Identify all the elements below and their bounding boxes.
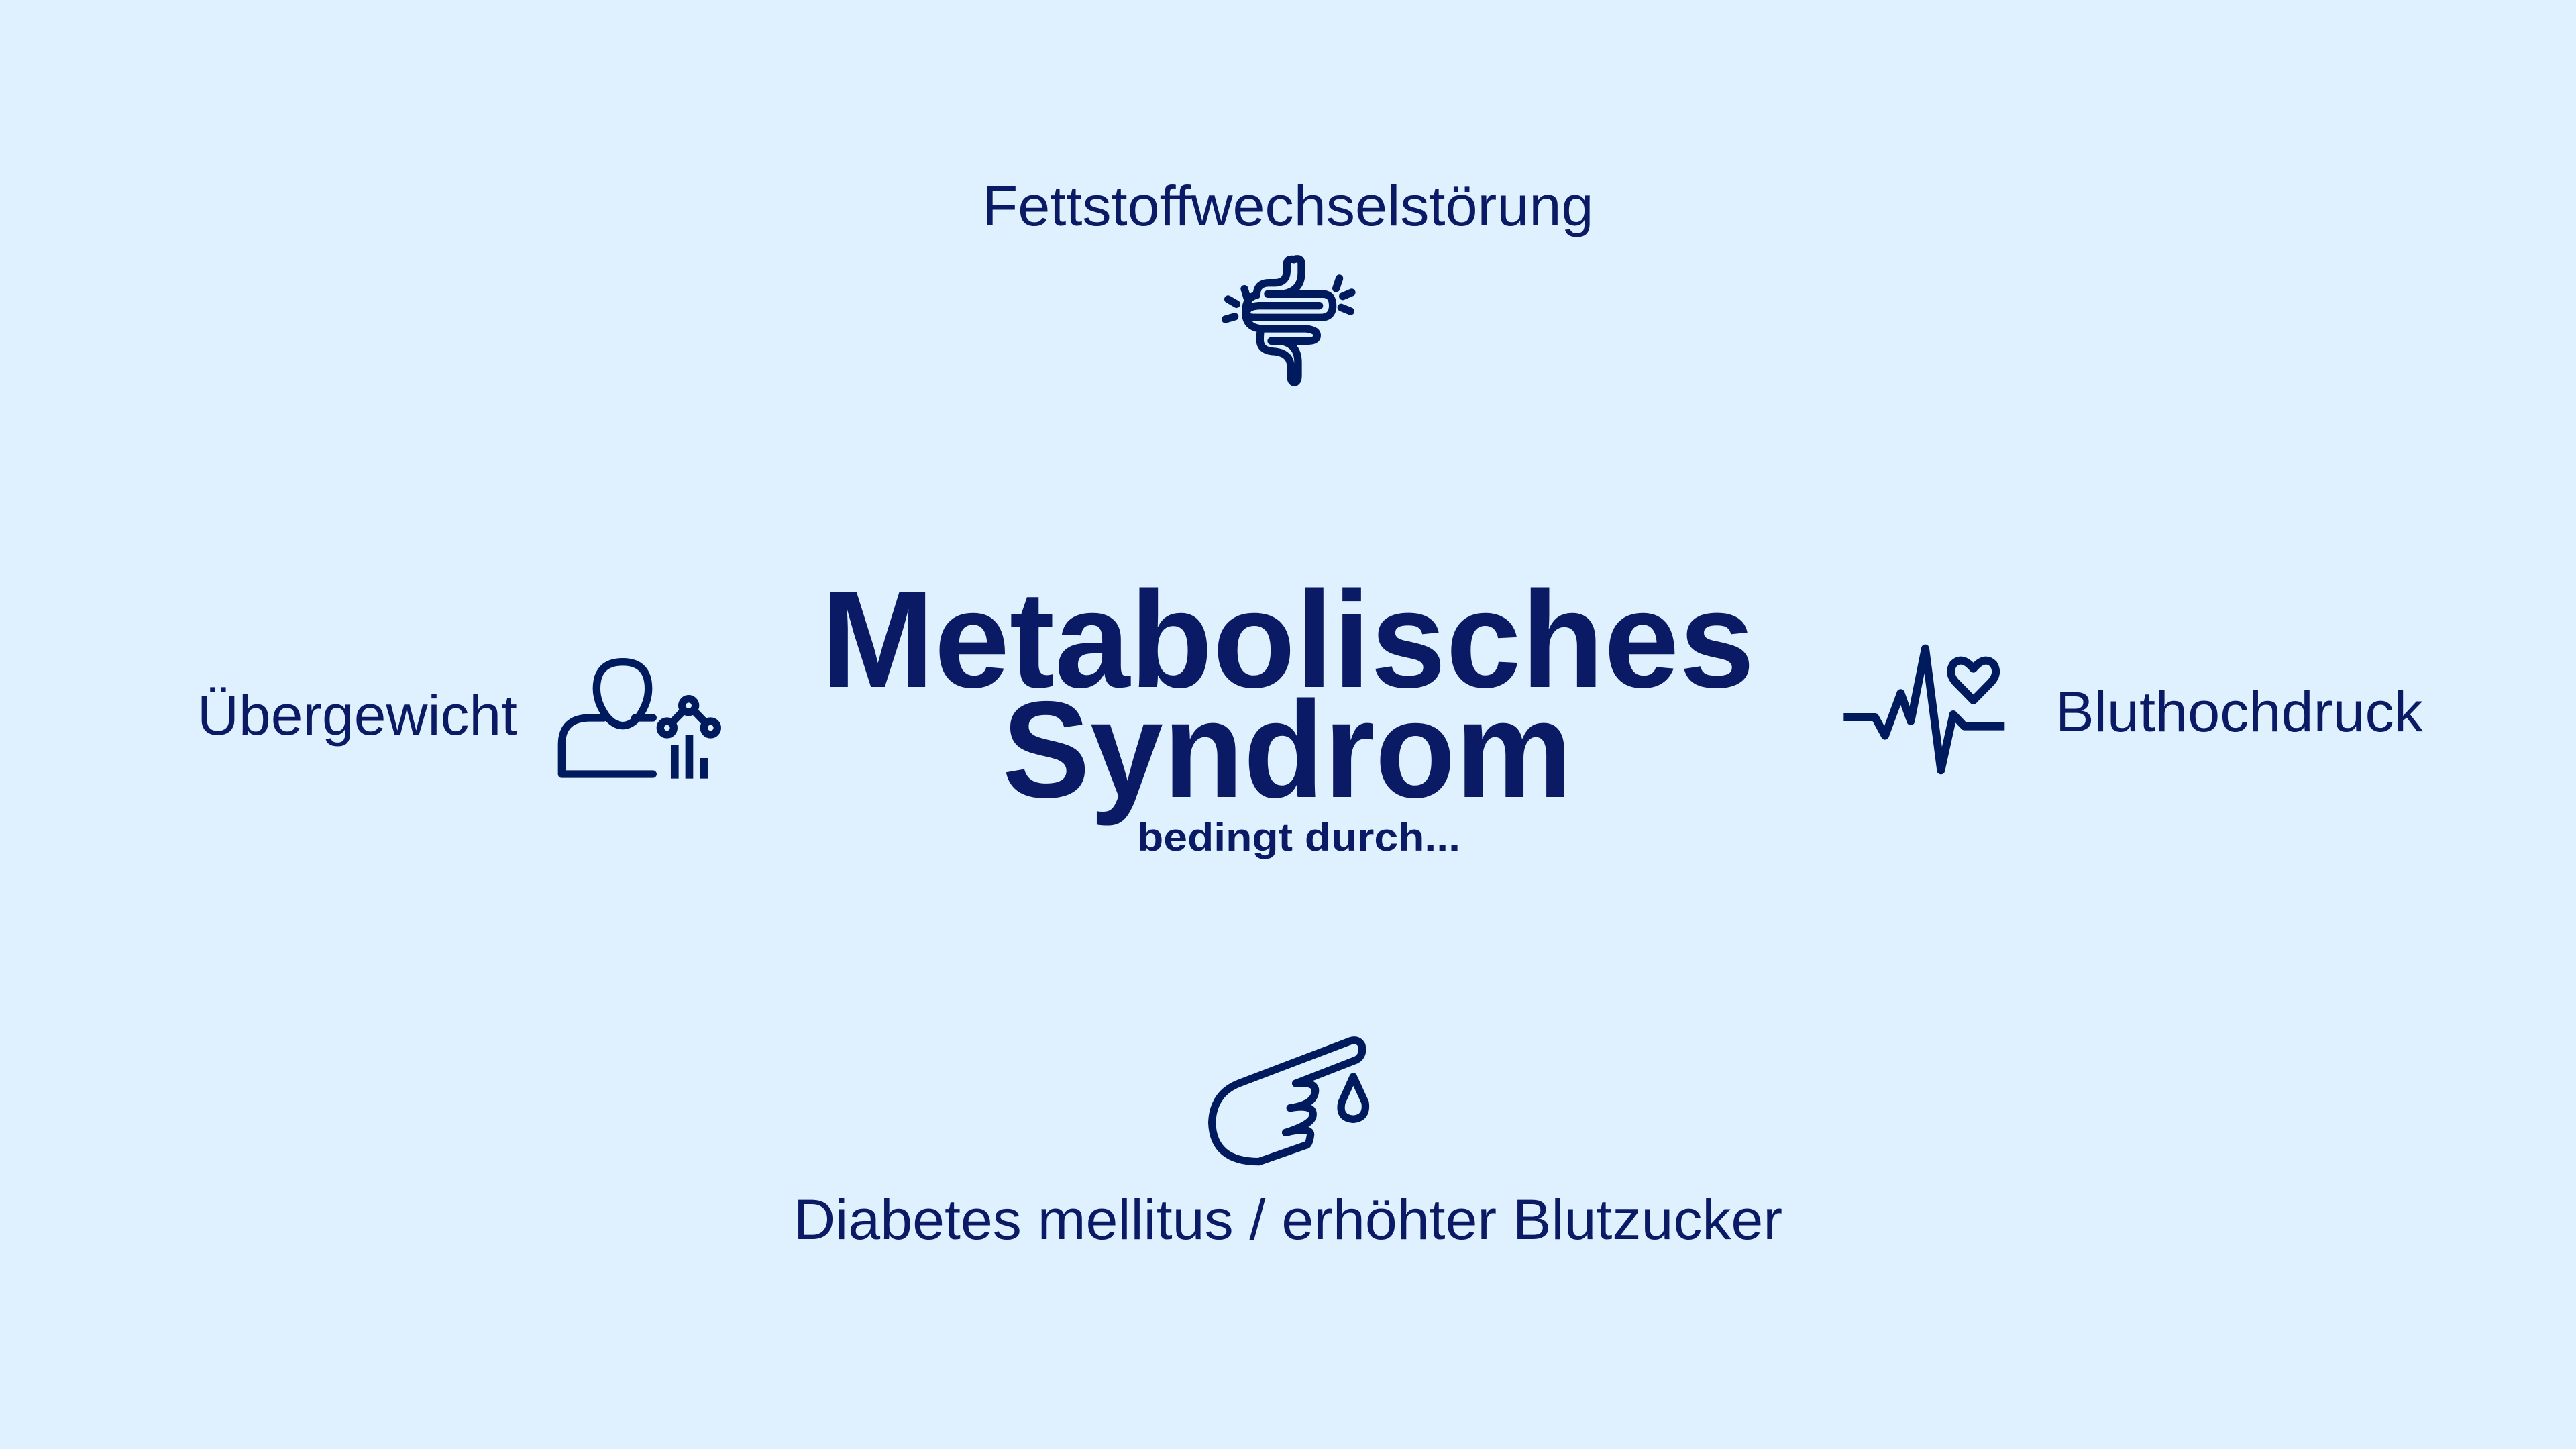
- label: Fettstoffwechselstörung: Fettstoffwechselstörung: [982, 174, 1594, 237]
- icon: intestine: [1226, 259, 1352, 382]
- label: Bluthochdruck: Bluthochdruck: [2055, 680, 2424, 743]
- title: Metabolisches: [821, 563, 1755, 716]
- title: Syndrom: [1002, 673, 1572, 826]
- icon: person with chart: [561, 662, 717, 779]
- label: Diabetes: Diabetes mellitus / erhöhter Blutzucker: [794, 1188, 1782, 1251]
- icon: heartbeat: [1843, 649, 2004, 770]
- subtitle: bedingt durch...: [1137, 816, 1460, 859]
- title: [821, 563, 1755, 826]
- label: Übergewicht: Übergewicht: [197, 684, 517, 747]
- icon: finger with blood drop: [1212, 1040, 1365, 1162]
